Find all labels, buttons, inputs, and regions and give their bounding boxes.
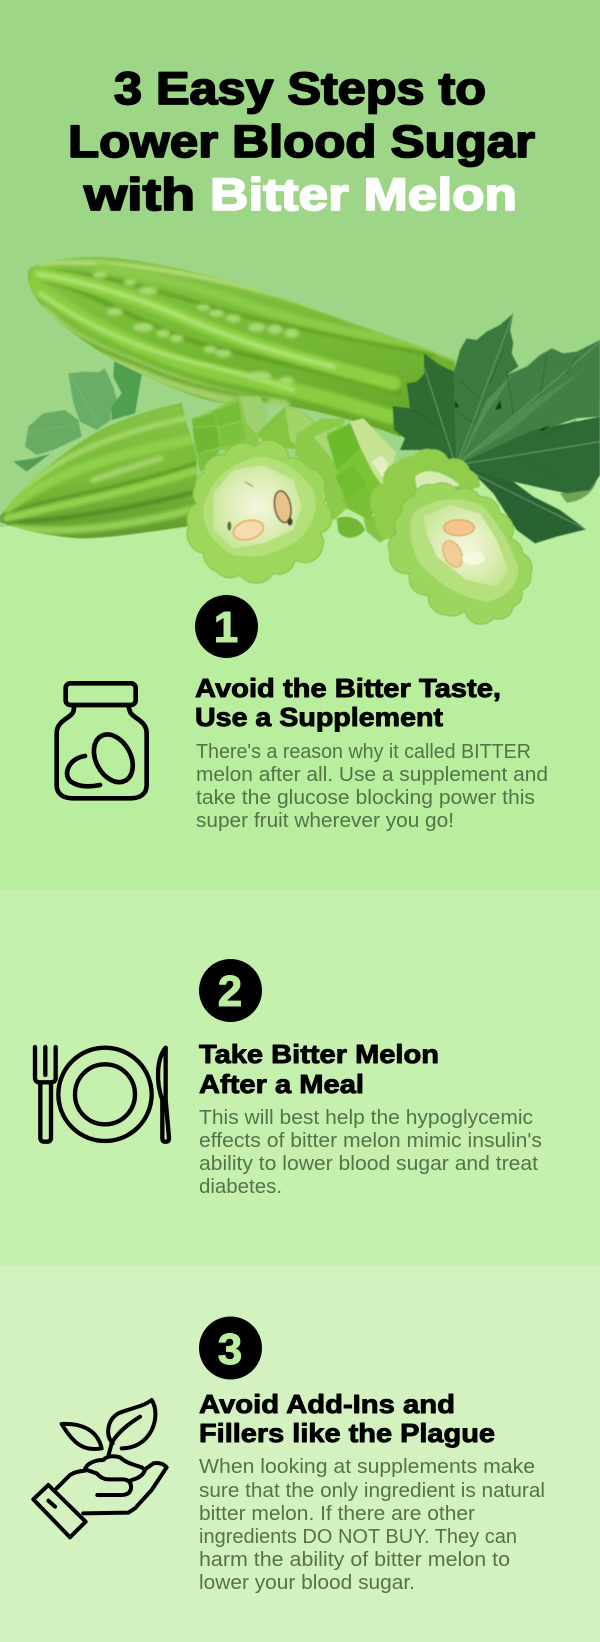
step 3 body text: bitter melon. If there are other [199, 1503, 475, 1525]
front melon slice with seeds [187, 440, 332, 583]
step 1 body text [196, 741, 548, 832]
title: 3 Easy Steps to [114, 63, 486, 114]
step 3 body text: ingredients DO NOT BUY. They can [199, 1526, 517, 1548]
step 1 heading [195, 673, 501, 732]
step 3 body text: lower your blood sugar. [199, 1572, 415, 1594]
step 2 body text: ability to lower blood sugar and treat [199, 1153, 538, 1175]
step 3 body text [199, 1456, 545, 1594]
step 3 body text: sure that the only ingredient is natural [199, 1480, 545, 1502]
step 1 body text: take the glucose blocking power this [196, 787, 535, 809]
title: Bitter Melon [210, 169, 517, 220]
side-on melon slices [257, 407, 397, 543]
step 3 number badge [199, 1316, 262, 1380]
step 2 body text: effects of bitter melon mimic insulin's [199, 1130, 542, 1152]
step 2 heading: After a Meal [199, 1069, 364, 1099]
step 2 heading: Take Bitter Melon [199, 1039, 439, 1069]
illustration: bitter melons, slices and leaves [0, 257, 600, 624]
icon: supplement jar [57, 683, 147, 798]
step 2 number badge [199, 959, 262, 1022]
icon: hand holding seedling [33, 1400, 167, 1537]
back melon slice [370, 449, 480, 540]
step 1 heading: Avoid the Bitter Taste, [195, 673, 501, 703]
step 1 body text: melon after all. Use a supplement and [196, 764, 548, 786]
step 1 heading: Use a Supplement [195, 702, 443, 732]
step 3 number badge: 3 [218, 1325, 242, 1374]
step 3 heading: Fillers like the Plague [199, 1418, 495, 1448]
step 2 body text: diabetes. [199, 1176, 282, 1198]
step 1 body text: There's a reason why it called BITTER [196, 741, 531, 763]
step 3 body text: When looking at supplements make [199, 1456, 535, 1478]
panel: step 2 background [0, 890, 600, 1266]
step 2 body text [199, 1107, 542, 1198]
small leaves behind melons [13, 345, 146, 472]
title: Lower Blood Sugar [68, 116, 535, 167]
title [68, 63, 535, 220]
step 2 number badge: 2 [218, 967, 242, 1016]
title: with [83, 169, 195, 220]
chopped melon piece [192, 395, 268, 472]
large dark leaf [393, 313, 600, 543]
step 1 body text: super fruit wherever you go! [196, 810, 454, 832]
step 2 body text: This will best help the hypoglycemic [199, 1107, 533, 1129]
panel: header background [0, 0, 600, 540]
panel: step 1 background [0, 402, 600, 890]
step 3 body text: harm the ability of bitter melon to [199, 1549, 510, 1571]
step 3 heading [199, 1389, 495, 1448]
panel: step 3 background [0, 1266, 600, 1642]
step 2 heading [199, 1039, 439, 1099]
lower right melon slice with seeds [388, 483, 532, 624]
step 3 heading: Avoid Add-Ins and [199, 1389, 455, 1419]
icon: plate with fork and knife [35, 1047, 169, 1142]
step 1 number badge: 1 [214, 603, 238, 652]
upper melon [28, 257, 455, 437]
step 1 number badge [195, 595, 258, 658]
lower melon [0, 403, 197, 538]
